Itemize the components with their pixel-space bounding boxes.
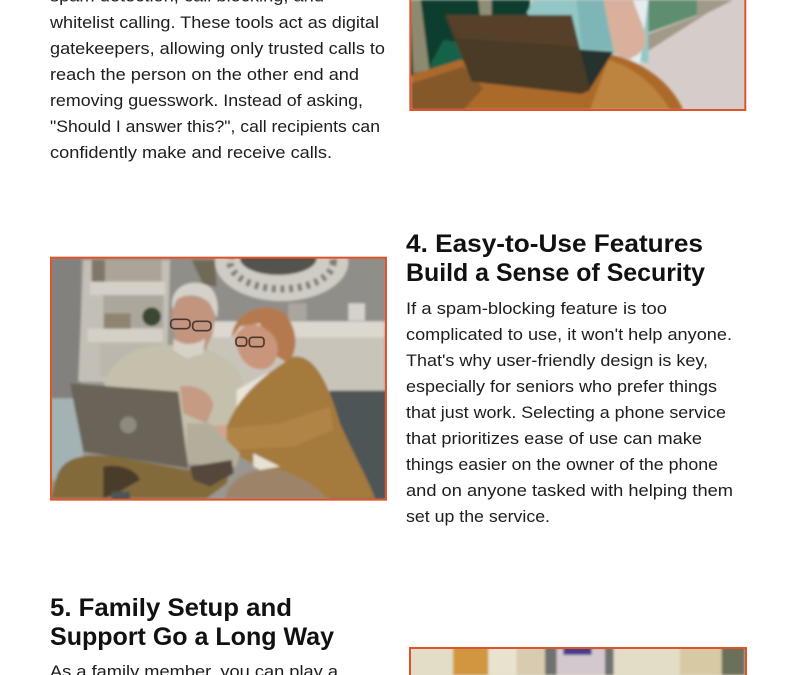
heading: section 5: Support Go a Long Way [50, 623, 334, 651]
heading: section 4: 4. Easy-to-Use Features [406, 230, 703, 258]
photo: person with laptop at wooden table [410, 0, 745, 110]
text block: section 4 body: If a spam-blocking feature is too [406, 299, 667, 318]
text block: section 3 body: reach the person on the other end and [50, 65, 359, 84]
text block: section 4 body: complicated to use, it won't help anyone. [406, 325, 732, 344]
text block: section 4 body: that prioritizes ease of use can make [406, 429, 702, 448]
photo: senior couple on sofa with laptop [50, 256, 387, 501]
text block: section 4 body [406, 299, 733, 526]
text block: section 4 body: set up the service. [406, 507, 550, 526]
heading: section 4: Build a Sense of Security [406, 259, 705, 287]
text block: section 4 body: that just work. Selecting a phone service [406, 403, 726, 422]
heading: section 5 [50, 594, 334, 651]
text block: section 4 body: especially for seniors who prefer things [406, 377, 717, 396]
text block: section 4 body: and on anyone tasked with helping them [406, 481, 733, 500]
text block: section 4 body: things easier on the owner of the phone [406, 455, 718, 474]
text block: section 3 body: gatekeepers, allowing only trusted calls to [50, 39, 385, 58]
text block: section 3 body [49, 0, 385, 162]
text block: section 3 body: removing guesswork. Instead of asking, [50, 91, 363, 110]
glasses: man [171, 319, 211, 331]
text block: section 3 body: "Should I answer this?", call recipients can [50, 117, 380, 136]
heading: section 5: 5. Family Setup and [50, 594, 292, 622]
text block: section 3 body: whitelist calling. These tools act as digital [49, 13, 379, 32]
photo: wood panel wall with framed picture [409, 647, 747, 675]
text block: section 3 body: confidently make and receive calls. [50, 143, 332, 162]
text block: section 4 body: That's why user-friendly design is key, [406, 351, 708, 370]
heading: section 4 [406, 230, 705, 287]
glasses: woman [236, 337, 264, 347]
